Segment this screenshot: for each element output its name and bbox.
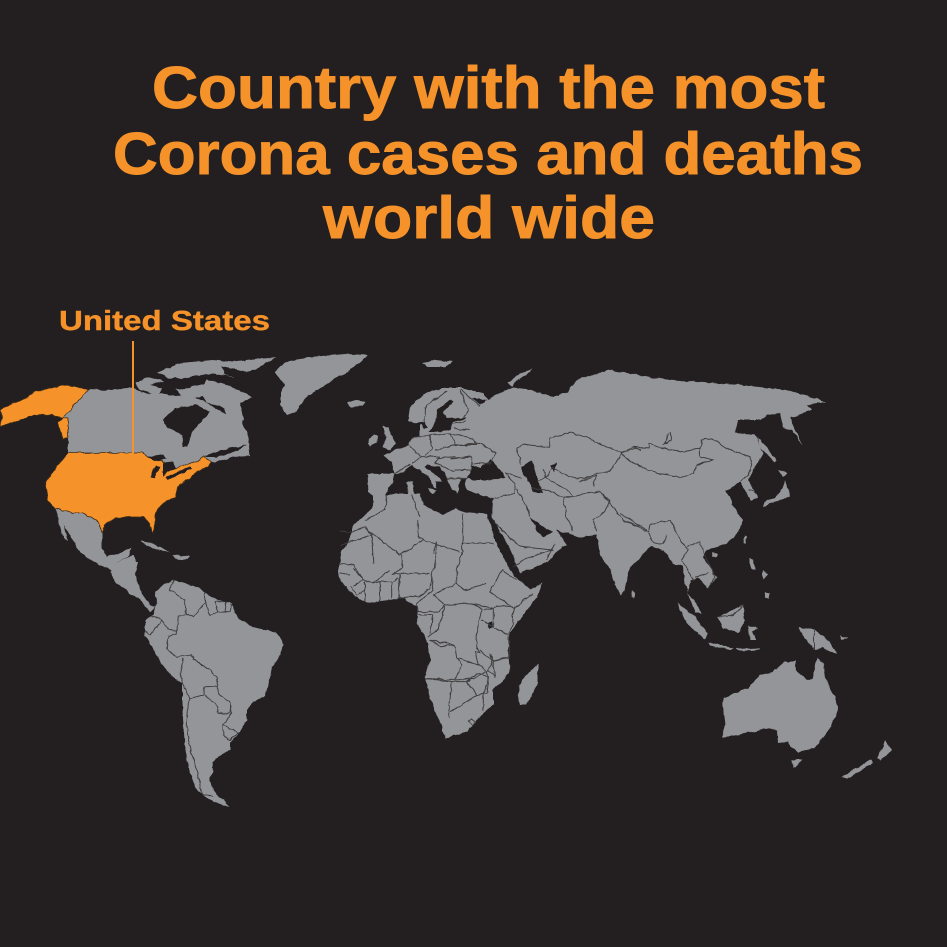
Tasmania	[792, 760, 803, 768]
leader line to United States	[132, 341, 134, 454]
country border: New Guinea and Borneo	[718, 605, 814, 650]
Great Lakes	[147, 454, 191, 480]
Madagascar	[518, 663, 538, 705]
New Zealand	[842, 740, 892, 779]
inland seas	[405, 385, 559, 629]
North America: Canada and Arctic islands	[57, 354, 368, 475]
country borders: Europe, Middle East and Central Asia	[340, 390, 640, 567]
highlighted country: United States	[0, 385, 212, 534]
title: Country with the most	[152, 55, 825, 121]
Australia	[722, 657, 838, 752]
title: Corona cases and deaths	[113, 121, 863, 187]
Mexico, Central America and Caribbean	[55, 508, 190, 612]
islands	[347, 360, 848, 655]
country borders: Africa	[340, 543, 533, 725]
contiguous states	[45, 453, 212, 534]
Eurasia	[367, 370, 827, 613]
world map	[0, 354, 892, 807]
country borders: East Asia and Southeast Asia	[620, 432, 755, 588]
Hudson Bay and Arctic channels	[150, 366, 275, 457]
title	[113, 55, 863, 251]
title: world wide	[322, 185, 655, 251]
Africa	[338, 494, 542, 738]
label: United States: United States	[59, 305, 270, 336]
country borders: South America	[145, 580, 238, 797]
Alaska	[0, 385, 89, 440]
South America	[145, 580, 284, 807]
